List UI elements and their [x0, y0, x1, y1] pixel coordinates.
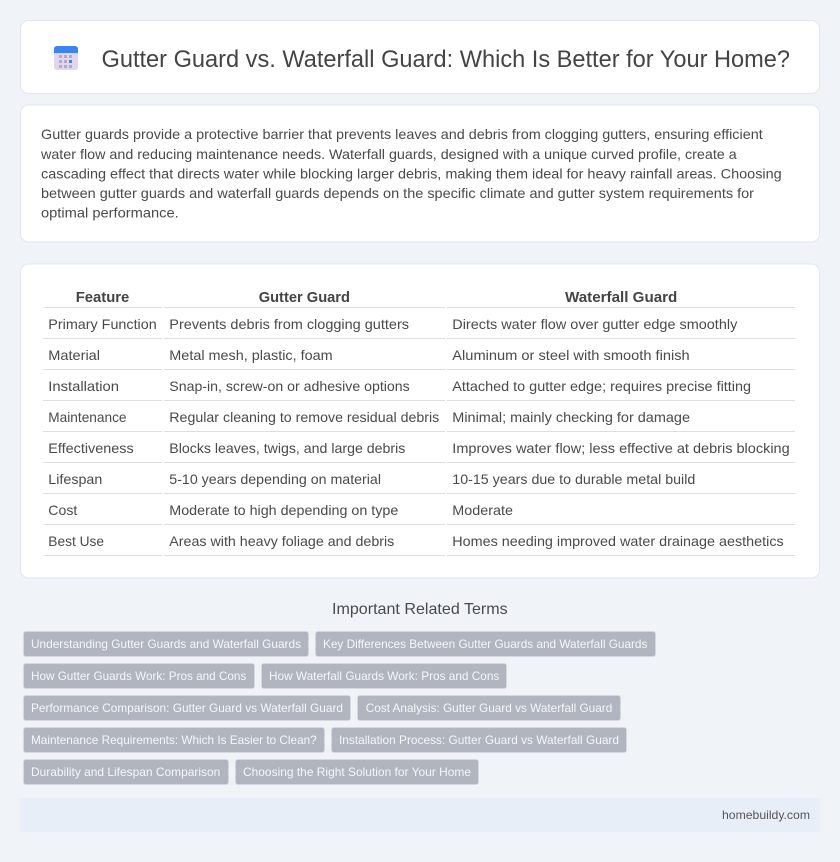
tag: How Gutter Guards Work: Pros and Cons — [31, 669, 246, 683]
row: material: Metal mesh, plastic, foam — [169, 347, 333, 363]
row: maintenance — [48, 409, 690, 425]
row: lifespan: 10-15 years due to durable metal build — [452, 471, 695, 487]
tag: Performance Comparison: Gutter Guard vs Waterfall Guard — [31, 701, 343, 715]
icon: calendar — [54, 46, 78, 70]
tag — [262, 664, 506, 688]
tag — [24, 728, 324, 752]
row: lifespan — [48, 471, 695, 487]
panel: introduction text — [20, 105, 820, 242]
row: primary function — [48, 316, 737, 332]
row: material: Material — [48, 347, 100, 363]
text block: intro paragraph: optimal performance. — [41, 204, 179, 220]
panel: comparison table — [20, 264, 820, 578]
title: Gutter Guard vs. Waterfall Guard: Which Is Better for Your Home? — [102, 46, 790, 73]
row: effectiveness: Improves water flow; less effective at debris blocking — [452, 440, 790, 456]
tag — [24, 664, 254, 688]
row: primary function: Directs water flow over gutter edge smoothly — [452, 316, 737, 332]
row: cost: Cost — [48, 502, 77, 518]
tag: How Waterfall Guards Work: Pros and Cons — [269, 669, 499, 683]
heading: important related terms: Important Related Terms — [332, 601, 508, 618]
tag — [358, 696, 620, 720]
row: maintenance: Minimal; mainly checking for damage — [452, 409, 690, 425]
tag: Understanding Gutter Guards and Waterfall Guards — [31, 637, 301, 651]
row: best use: Homes needing improved water drainage aesthetics — [452, 533, 784, 549]
row: lifespan: Lifespan — [48, 471, 102, 487]
row: installation — [48, 378, 751, 394]
table header: Waterfall Guard — [565, 289, 677, 306]
tag: Key Differences Between Gutter Guards and Waterfall Guards — [323, 637, 647, 651]
table header: Gutter Guard — [259, 289, 350, 306]
row: primary function: Prevents debris from clogging gutters — [169, 316, 409, 332]
row: maintenance: Maintenance — [48, 409, 127, 425]
row: material: Aluminum or steel with smooth finish — [452, 347, 690, 363]
text block: intro paragraph: cascading effect that directs water while blocking larger debris, making them ideal for heavy rainfall areas. Choosing — [41, 166, 782, 182]
tag — [24, 696, 350, 720]
row: cost: Moderate to high depending on type — [169, 502, 399, 518]
row: installation: Snap-in, screw-on or adhesive options — [169, 378, 410, 394]
tag — [236, 760, 478, 784]
row: effectiveness: Effectiveness — [48, 440, 134, 456]
footer — [20, 798, 820, 832]
tag — [24, 760, 228, 784]
text block: intro paragraph: between gutter guards and waterfall guards depends on the specific climate and gutter system requirements for — [41, 185, 754, 201]
row: lifespan: 5-10 years depending on material — [169, 471, 381, 487]
row: best use: Areas with heavy foliage and debris — [169, 533, 394, 549]
row: cost: Moderate — [452, 502, 513, 518]
table header — [76, 289, 677, 306]
row: best use — [48, 533, 784, 549]
row: installation: Installation — [48, 378, 119, 394]
tag — [332, 728, 626, 752]
row: installation: Attached to gutter edge; requires precise fitting — [452, 378, 751, 394]
tag — [316, 632, 656, 656]
text block: intro paragraph — [40, 126, 782, 220]
tag: Durability and Lifespan Comparison — [31, 765, 220, 779]
tag — [24, 632, 308, 656]
footer source text: homebuildy.com — [722, 808, 810, 822]
tag: Maintenance Requirements: Which Is Easier to Clean? — [31, 733, 317, 747]
row: primary function: Primary Function — [48, 316, 157, 332]
panel: header card — [20, 20, 820, 94]
tag: Installation Process: Gutter Guard vs Waterfall Guard — [339, 733, 619, 747]
row: effectiveness — [48, 440, 790, 456]
table header: Feature — [76, 289, 129, 306]
row: maintenance: Regular cleaning to remove residual debris — [169, 409, 439, 425]
text block: intro paragraph: Gutter guards provide a protective barrier that prevents leaves and debris from clogging gutters, ensuring efficient — [41, 126, 763, 142]
panel: related term tags — [24, 632, 656, 784]
row: cost — [48, 502, 513, 518]
row: effectiveness: Blocks leaves, twigs, and large debris — [169, 440, 405, 456]
row: material — [48, 347, 690, 363]
text block: intro paragraph: water flow and reducing maintenance needs. Waterfall guards, designed with a unique curved profile, create a — [40, 146, 737, 162]
tag: Cost Analysis: Gutter Guard vs Waterfall Guard — [366, 701, 612, 715]
row: best use: Best Use — [48, 533, 104, 549]
tag: Choosing the Right Solution for Your Home — [243, 765, 471, 779]
